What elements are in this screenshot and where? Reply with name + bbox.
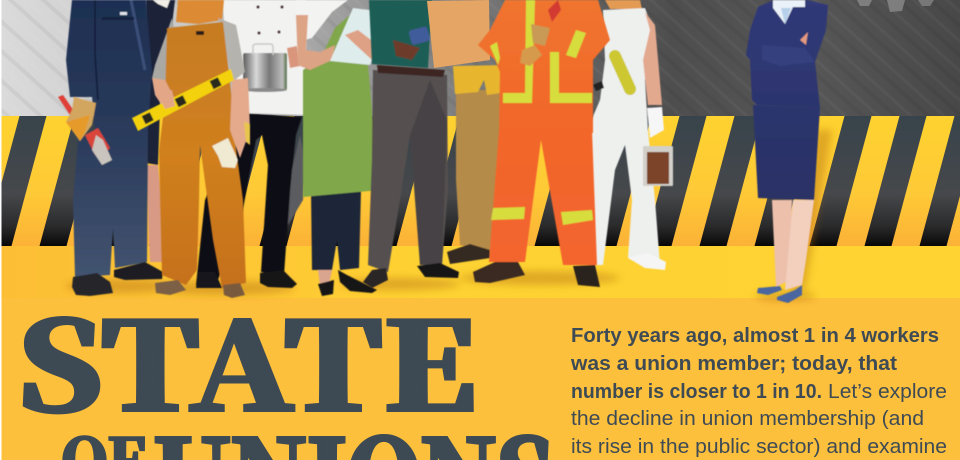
title panel background [0, 298, 960, 460]
intro paragraph: number is closer to 1 in 10. [571, 380, 822, 403]
wrench [58, 95, 112, 165]
floor band [0, 246, 960, 298]
intro paragraph: Let’s explore [828, 380, 947, 403]
figure: woman in green apron [296, 0, 393, 296]
intro paragraph: was a union member; today, that [570, 352, 897, 375]
figure: businesswoman with crossed arms [746, 0, 828, 303]
intro paragraph: Forty years ago, almost 1 in 4 workers [571, 324, 939, 347]
figure: mechanic in navy coveralls [58, 0, 163, 296]
left page edge [0, 0, 2, 460]
orange folder [427, 0, 490, 68]
title: STATE OF UNIONS [18, 273, 554, 460]
clipboard paper [330, 8, 393, 65]
figure: chef [196, 0, 306, 288]
figure: worker in tan trousers [447, 65, 510, 264]
white work gloves [212, 138, 238, 168]
figure: painter in white [585, 0, 673, 270]
intro paragraph: its rise in the public sector) and examine [571, 435, 947, 458]
work glove [66, 97, 96, 141]
hazard stripe band [0, 116, 960, 246]
spirit level [132, 69, 234, 131]
paint can [643, 146, 673, 186]
intro paragraph: the decline in union membership (and [571, 407, 924, 430]
figure: man in green shirt and grey trousers [363, 0, 459, 288]
floor shadows [65, 130, 832, 301]
figure: woman in orange overalls with level [132, 0, 250, 298]
figure: high-visibility worker [473, 0, 610, 287]
red wrench and gloves [520, 0, 561, 66]
background wall [0, 0, 960, 116]
title word: STATE: STATE [18, 273, 477, 445]
paint roller [615, 56, 630, 89]
chef's cooking pot [243, 44, 287, 92]
figure: woman in dark dress behind [146, 0, 175, 262]
intro paragraph [570, 324, 947, 458]
